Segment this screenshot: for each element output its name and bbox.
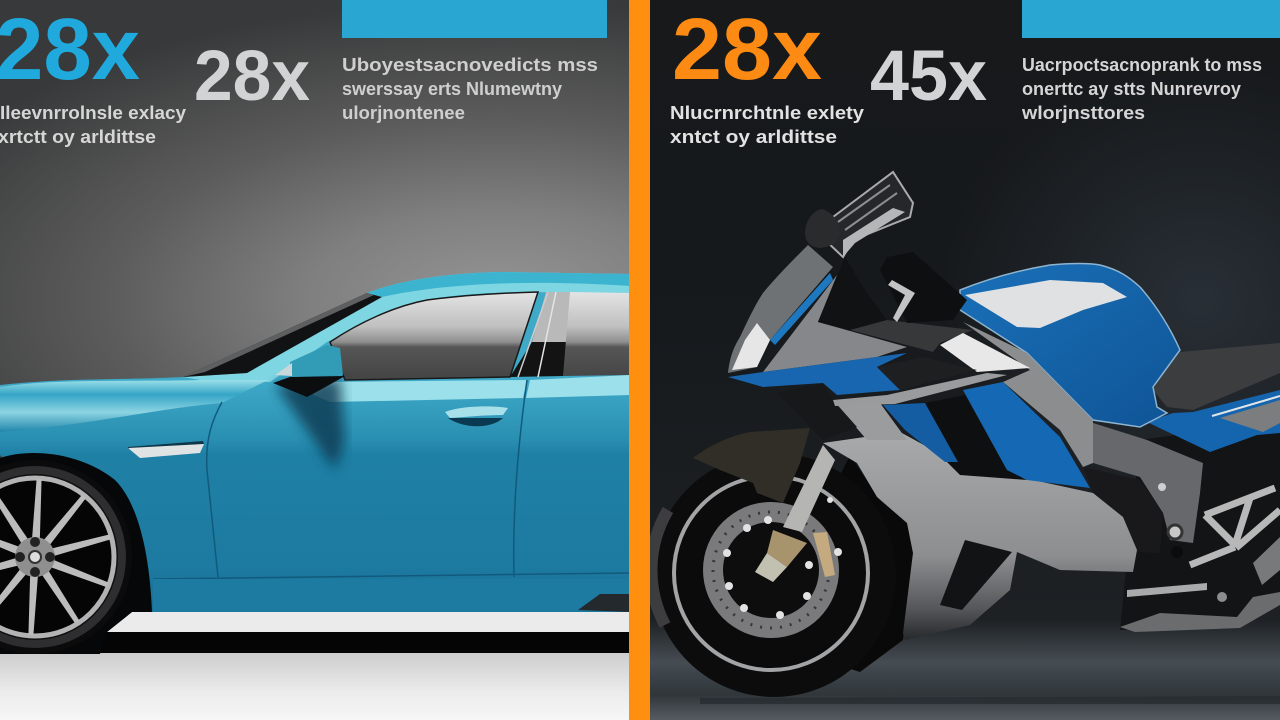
grey fairing <box>823 432 1137 640</box>
stat: 28x grey: 28x <box>194 37 310 116</box>
mirror stalk <box>805 209 840 248</box>
mirror shadow <box>275 378 345 470</box>
floor shadow <box>700 696 1280 704</box>
floor <box>0 612 630 720</box>
caption: left description <box>342 55 598 123</box>
caption: right description <box>1021 55 1262 123</box>
car illustration <box>0 272 630 654</box>
mirror <box>273 345 345 397</box>
pillars <box>510 292 570 377</box>
rear vent <box>578 594 630 612</box>
windshield <box>183 293 382 377</box>
caption: right stat: Nlucrnrchtnle exlety <box>670 103 864 123</box>
handlebar <box>880 252 967 323</box>
grey strip <box>963 322 1093 467</box>
side window <box>330 292 538 380</box>
icon: car wheel <box>0 460 132 654</box>
door handle <box>445 406 508 426</box>
upper mirror <box>825 172 913 257</box>
caption: left stat: xrtctt oy arldittse <box>0 127 156 147</box>
frame and engine <box>1083 423 1203 558</box>
stat: 45x grey: 45x <box>870 37 987 116</box>
seat <box>1153 343 1280 410</box>
fuel tank <box>960 264 1180 427</box>
panel: motorcycle side <box>650 0 1280 720</box>
belt strips <box>307 375 630 402</box>
door lines <box>153 380 630 579</box>
caption: right stat <box>670 103 864 147</box>
caption: right stat: xntct oy arldittse <box>670 127 837 147</box>
icon: motorcycle front wheel <box>651 453 913 697</box>
caption: left stat: Ileevnrrolnsle exlacy <box>0 103 186 123</box>
caption: left description: swerssay erts Nlumewtny <box>342 79 562 99</box>
front mudguard <box>693 428 810 503</box>
motorcycle rear section <box>1120 420 1280 632</box>
front fork <box>755 445 835 582</box>
rear blue panel <box>1147 390 1280 452</box>
rear window <box>563 292 630 376</box>
caption: right description: onerttc ay stts Nunrevroy <box>1022 79 1241 99</box>
header bar: right <box>1022 0 1280 38</box>
fairing vent <box>940 540 1012 610</box>
caption: left description: ulorjnontenee <box>342 103 465 123</box>
caption: right description: wlorjnsttores <box>1021 103 1145 123</box>
caption: right description: Uacrpoctsacnoprank to mss <box>1022 55 1262 75</box>
header bar: left <box>342 0 607 38</box>
panel: car side <box>0 0 630 720</box>
motorcycle front <box>728 172 1030 440</box>
wheel arch <box>0 453 152 654</box>
divider: orange <box>629 0 650 720</box>
side marker <box>128 441 204 458</box>
side blue panels <box>835 382 1090 488</box>
stat: 28x orange: 28x <box>672 1 822 98</box>
caption: left description: Uboyestsacnovedicts mss <box>342 55 598 75</box>
hood highlight <box>0 380 268 432</box>
caption: left stat <box>0 103 186 147</box>
